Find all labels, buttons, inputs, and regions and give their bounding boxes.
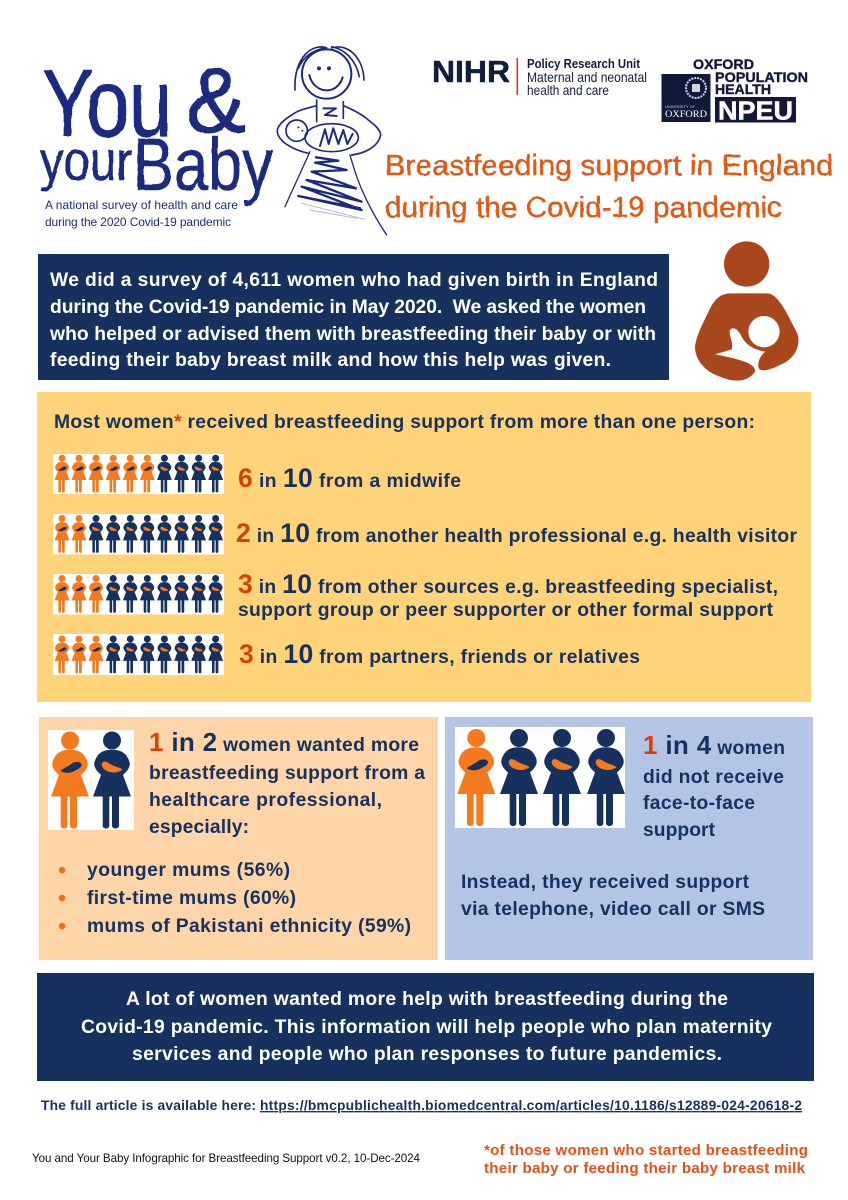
text: 1 in 4 statement: support — [643, 820, 716, 841]
text: footnote: *of those women who started breastfeeding — [484, 1142, 808, 1159]
text: 1 in 2 statement: especially: — [149, 817, 249, 838]
logo: Oxford Population Health NPEU: OXFORD — [665, 109, 708, 119]
logo: NIHR Policy Research Unit: NIHR — [432, 54, 510, 89]
icon: breastfeeding mother — [695, 241, 798, 381]
text: full article link: https://bmcpublichealth.biomedcentral.com/articles/10.1186/s12889-024-20618-2 — [260, 1098, 802, 1113]
logo: You and your Baby wordmark: A national survey of health and care — [45, 198, 238, 212]
row: 6 in 10 from a midwife: 6 in 10 from a midwife — [238, 463, 461, 493]
panel: survey introduction: who helped or advised them with breastfeeding their baby or with — [49, 324, 656, 345]
text: version footer: You and Your Baby Infographic for Breastfeeding Support v0.2, 10-Dec-2024 — [32, 1152, 421, 1165]
row: 3 in 10 from other sources: support group or peer supporter or other formal support — [238, 600, 774, 621]
text: alternative support channels: via telephone, video call or SMS — [461, 899, 765, 920]
row: 3 in 10 from partners, friends or relatives — [53, 634, 640, 675]
panel: 1 in 2 wanted more support — [39, 717, 438, 960]
panel: sources of breastfeeding support — [37, 392, 811, 702]
title — [385, 150, 833, 224]
title: Breastfeeding support in England — [385, 150, 833, 182]
logo: Oxford Population Health NPEU — [662, 56, 808, 126]
text: alternative support channels — [461, 872, 765, 920]
logo: You and your Baby wordmark: You — [42, 50, 172, 157]
logo: You and your Baby wordmark: your — [40, 129, 132, 192]
row: 3 in 10 from other sources — [53, 569, 778, 621]
logo: You and your Baby wordmark: & — [186, 50, 246, 152]
illustration: hand-drawn mother holding baby — [277, 47, 387, 235]
text: 1 in 4 statement: 1 in 4 women — [643, 730, 785, 760]
logo: Oxford Population Health NPEU: POPULATION — [715, 69, 808, 85]
title: during the Covid-19 pandemic — [385, 192, 782, 224]
logo: Oxford Population Health NPEU: HEALTH — [715, 81, 771, 97]
icon: 1 in 2 women — [48, 730, 134, 830]
panel: conclusion: A lot of women wanted more help with breastfeeding during the — [126, 989, 728, 1010]
text: 1 in 4 statement — [643, 730, 785, 841]
list: groups wanting more support: mums of Pakistani ethnicity (59%) — [87, 916, 411, 937]
logo: NIHR Policy Research Unit: Policy Research Unit — [527, 56, 640, 71]
panel: conclusion: services and people who plan responses to future pandemics. — [132, 1044, 722, 1065]
logo: You and your Baby wordmark: Baby — [133, 123, 273, 206]
row: 3 in 10 from other sources: 3 in 10 from other sources e.g. breastfeeding specialist, — [238, 569, 778, 599]
text: 1 in 4 statement: face-to-face — [643, 793, 755, 814]
text: 1 in 2 statement: 1 in 2 women wanted more — [149, 727, 419, 757]
row: 2 in 10 from another health professional — [53, 514, 797, 554]
text: footnote — [484, 1142, 808, 1177]
text: 1 in 4 statement: did not receive — [643, 767, 784, 788]
text: 1 in 2 statement: healthcare professional, — [149, 790, 382, 811]
panel: conclusion: Covid-19 pandemic. This information will help people who plan maternity — [81, 1017, 772, 1038]
logo: NIHR Policy Research Unit: Maternal and neonatal — [527, 70, 647, 85]
list: groups wanting more support: first-time mums (60%) — [87, 888, 296, 909]
panel: survey introduction: during the Covid-19 pandemic in May 2020. We asked the women — [50, 297, 646, 318]
logo: Oxford Population Health NPEU: OXFORD — [693, 56, 754, 72]
logo: Oxford Population Health NPEU: UNIVERSITY OF — [665, 105, 696, 109]
panel: survey introduction: We did a survey of 4,611 women who had given birth in England — [50, 270, 658, 291]
heading: most women received support: Most women* received breastfeeding support from more than one person: — [54, 412, 755, 433]
text: alternative support channels: Instead, they received support — [461, 872, 750, 893]
list: groups wanting more support: younger mums (56%) — [87, 860, 290, 881]
row: 6 in 10 from a midwife — [53, 454, 461, 494]
text: full article link: The full article is available here: — [41, 1098, 256, 1113]
panel: 1 in 4 no face-to-face support — [445, 717, 813, 960]
logo: Oxford Population Health NPEU: NPEU — [718, 96, 793, 126]
panel: conclusion — [37, 973, 814, 1081]
panel: survey introduction — [38, 254, 669, 380]
logo: You and your Baby wordmark — [40, 50, 273, 229]
list: groups wanting more support — [59, 860, 411, 937]
icon: 1 in 4 women — [455, 727, 625, 828]
logo: You and your Baby wordmark: during the 2020 Covid-19 pandemic — [45, 215, 231, 229]
text: footnote: their baby or feeding their baby breast milk — [484, 1160, 806, 1177]
logo: NIHR Policy Research Unit — [432, 54, 647, 98]
text: 1 in 2 statement — [149, 727, 425, 838]
logo: NIHR Policy Research Unit: health and care — [527, 83, 609, 98]
panel: survey introduction: feeding their baby breast milk and how this help was given. — [50, 350, 611, 371]
text: 1 in 2 statement: breastfeeding support from a — [149, 763, 425, 784]
row: 3 in 10 from partners, friends or relatives: 3 in 10 from partners, friends or relatives — [239, 639, 640, 669]
row: 2 in 10 from another health professional: 2 in 10 from another health professional e.g. health visitor — [236, 518, 797, 548]
